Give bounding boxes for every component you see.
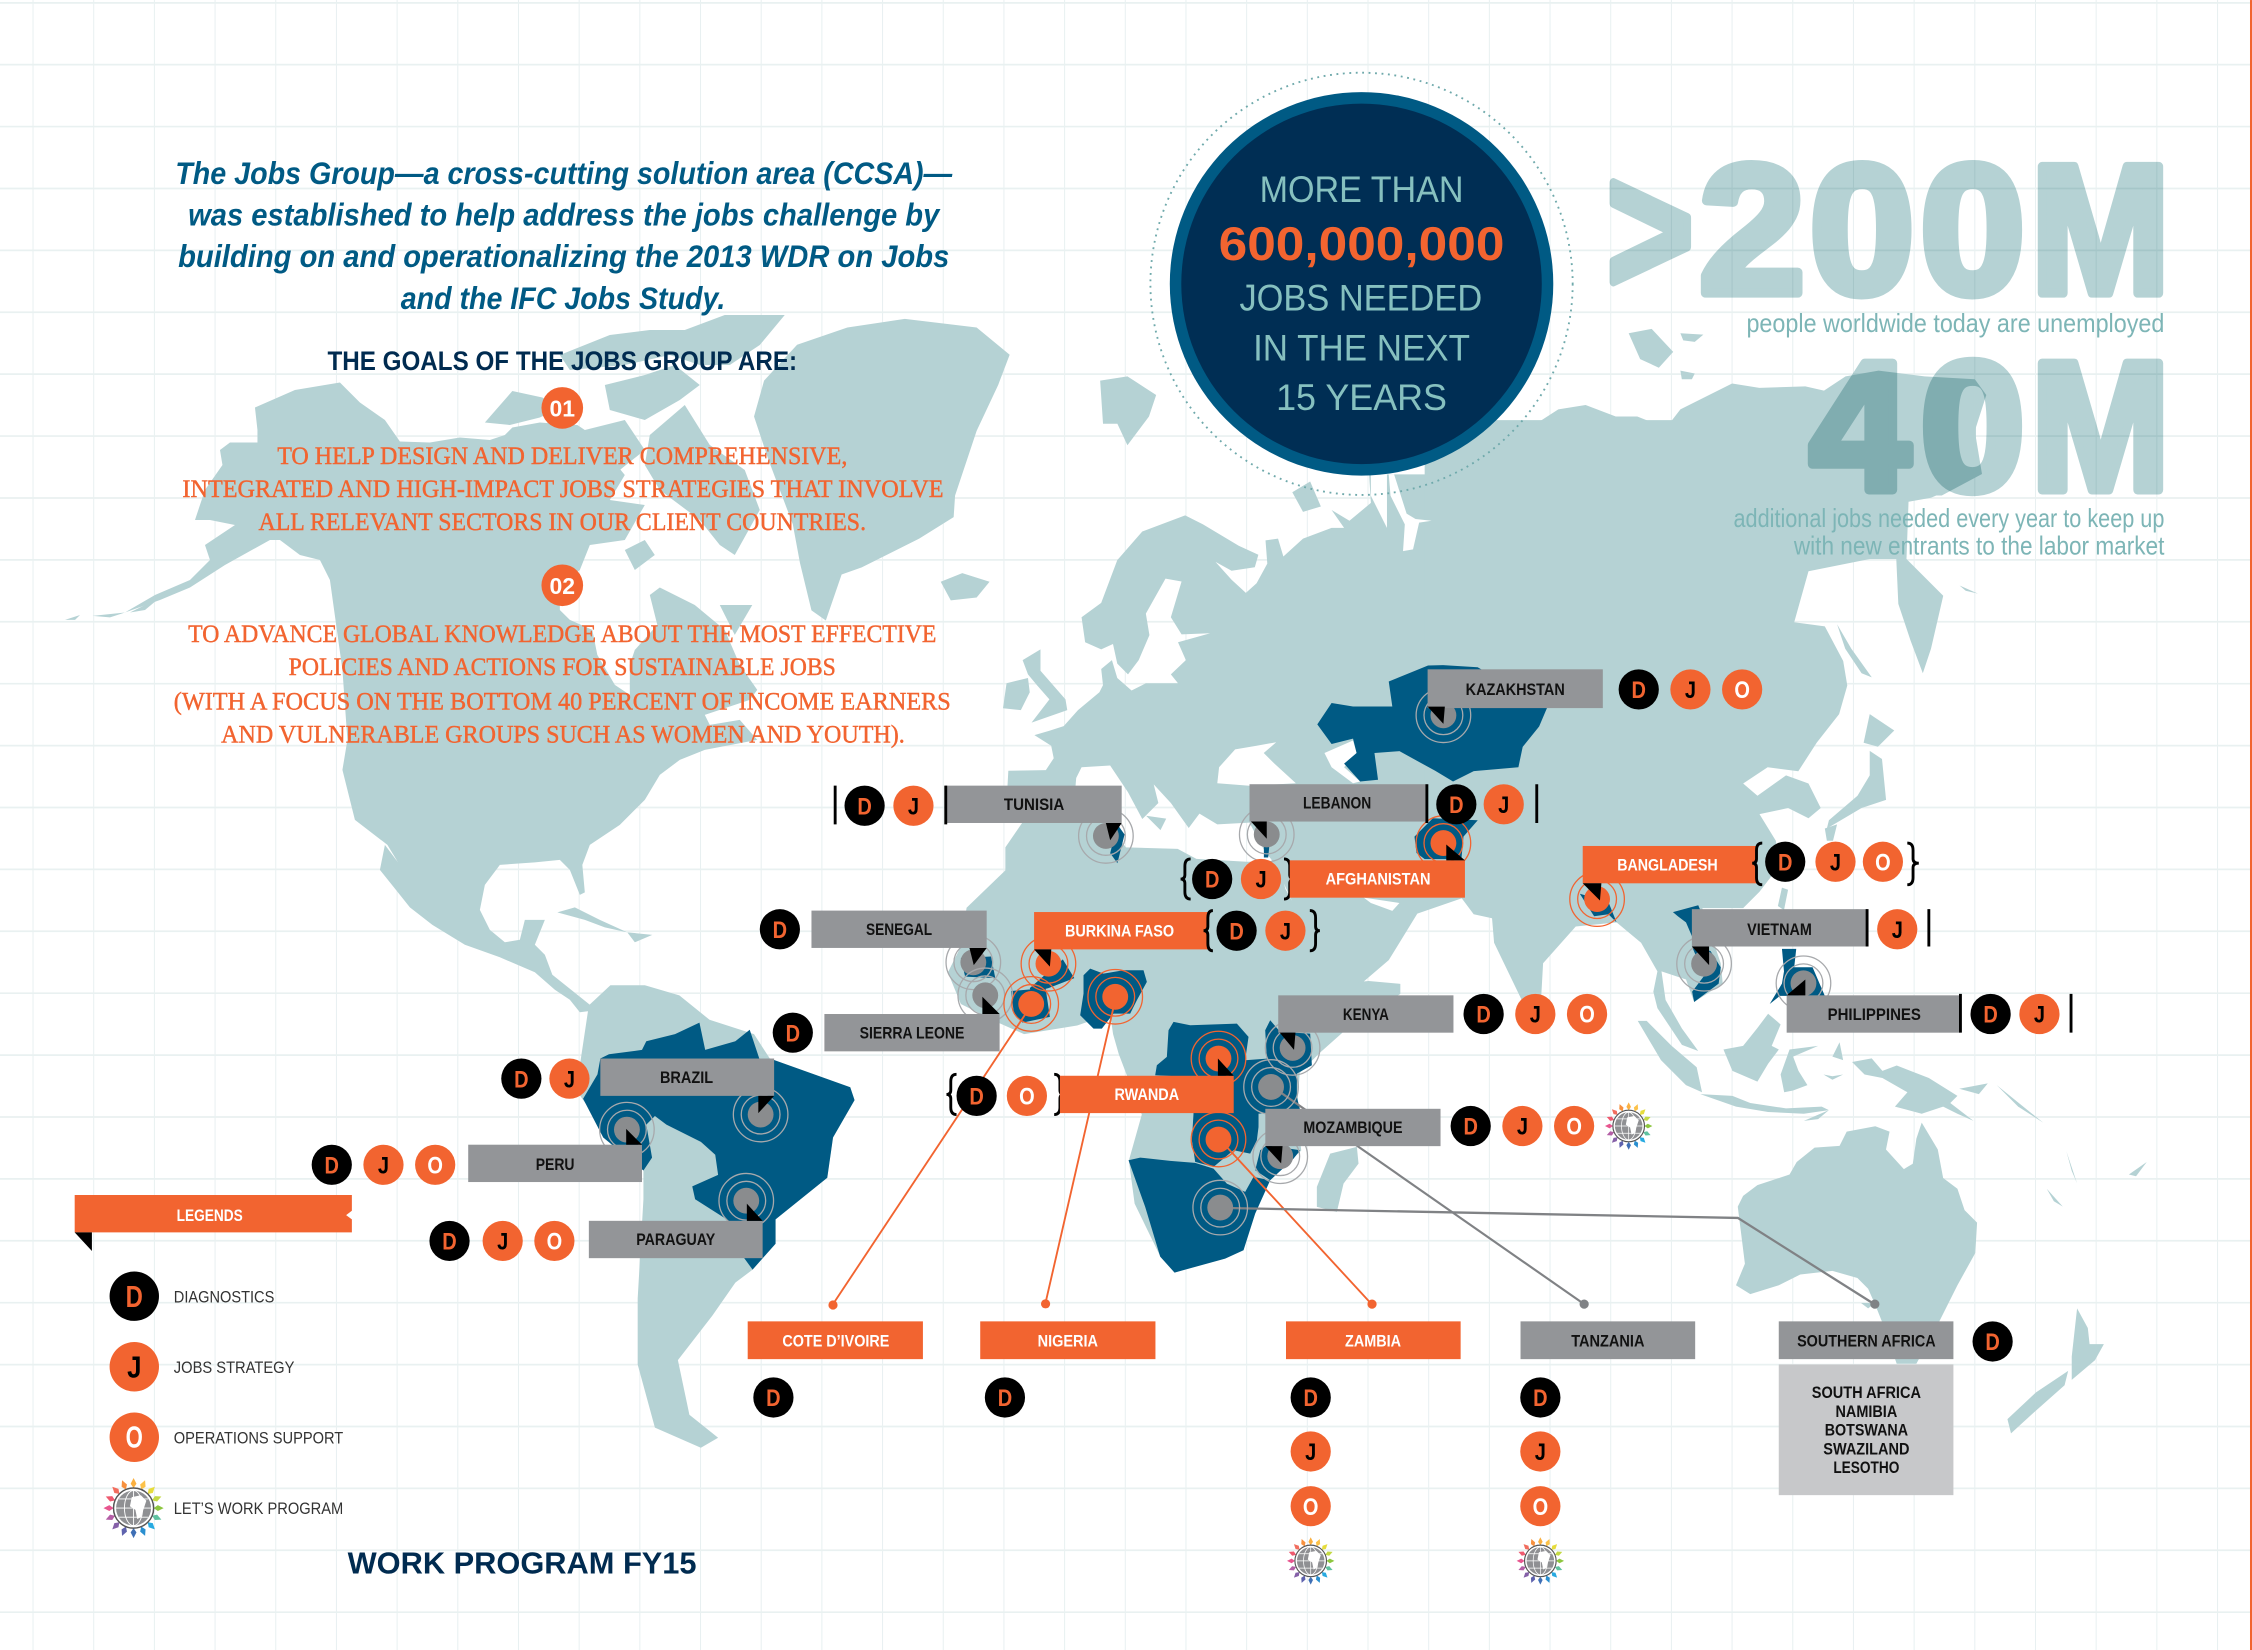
country: mozambique: [1265, 1102, 1652, 1163]
country: southern africa: D: [1985, 1328, 2000, 1356]
big circle callout: IN THE NEXT: [1253, 327, 1470, 369]
stat: >200M: 0: [1810, 127, 1914, 332]
country: cote d'ivoire: COTE D’IVOIRE: [782, 1332, 889, 1350]
legend: let's work program: LET’S WORK PROGRAM: [174, 1500, 343, 1518]
country: philippines: PHILIPPINES: [1828, 1006, 1921, 1024]
country: afghanistan: [1181, 845, 1465, 899]
country: zambia: D: [1303, 1384, 1318, 1412]
footer title: WORK PROGRAM FY15: [348, 1545, 697, 1580]
country: tanzania: O: [1533, 1493, 1548, 1520]
arctic ocean islands: [1100, 329, 1703, 445]
stat: 40M: 0: [1920, 324, 2025, 529]
country: rwanda: [946, 1059, 1234, 1116]
country: peru: J: [378, 1152, 389, 1179]
country: paraguay: [429, 1204, 763, 1261]
country: philippines: D: [1983, 1001, 1998, 1028]
country: kazakhstan: KAZAKHSTAN: [1466, 681, 1565, 699]
stat: 40M: M: [2031, 324, 2170, 529]
country: burkina faso: [1034, 911, 1320, 967]
goal 01 badge: [541, 387, 583, 429]
country: tanzania: D: [1533, 1384, 1548, 1412]
marker: afghanistan: [1416, 816, 1471, 870]
marker: tanzania: [1244, 1060, 1298, 1114]
country: burkina faso: D: [1229, 917, 1244, 945]
tanzania line: [1271, 1086, 1589, 1309]
country: cote d'ivoire: D: [766, 1384, 781, 1412]
country: kazakhstan: J: [1685, 676, 1696, 704]
country: philippines: J: [2034, 1001, 2045, 1028]
goal 02 badge: [541, 564, 583, 606]
country: nigeria: D: [998, 1384, 1012, 1412]
legend panel: [75, 1195, 352, 1538]
country: paraguay: O: [547, 1228, 562, 1255]
nigeria line: [1041, 997, 1116, 1308]
marker: vietnam: [1677, 936, 1731, 991]
kazakhstan: [1317, 665, 1547, 782]
country: peru: [312, 1129, 642, 1185]
country: mozambique: MOZAMBIQUE: [1303, 1119, 1402, 1137]
goal 02 text: AND VULNERABLE GROUPS SUCH AS WOMEN AND YOUTH).: [221, 720, 905, 749]
country: nigeria: [980, 1321, 1155, 1418]
country: paraguay: J: [497, 1228, 508, 1255]
country: bangladesh: O: [1875, 849, 1891, 876]
goal 02 text: [174, 619, 951, 749]
big circle callout: 600,000,000: [1219, 218, 1504, 271]
country: rwanda: D: [969, 1083, 984, 1110]
country: peru: D: [325, 1152, 339, 1179]
country: senegal: D: [773, 916, 787, 943]
caption: additional jobs: additional jobs needed every year to keep up: [1734, 505, 2164, 533]
country: kenya: KENYA: [1343, 1006, 1389, 1024]
country: afghanistan: J: [1255, 866, 1267, 893]
country: cote d'ivoire: [748, 1321, 923, 1418]
connector lines: [828, 997, 1879, 1310]
country: paraguay: PARAGUAY: [636, 1231, 715, 1249]
country: peru: PERU: [536, 1156, 574, 1174]
country: sierra leone: [773, 997, 1000, 1053]
country: southern africa: SOUTH AFRICA: [1812, 1384, 1921, 1402]
goal 01 text: INTEGRATED AND HIGH-IMPACT JOBS STRATEGIES THAT INVOLVE: [182, 474, 944, 503]
country: afghanistan: D: [1205, 866, 1219, 893]
marker: bangladesh: [1570, 872, 1624, 926]
country: brazil: BRAZIL: [660, 1069, 713, 1087]
country: bangladesh: BANGLADESH: [1617, 856, 1718, 874]
country: tanzania: TANZANIA: [1571, 1332, 1645, 1350]
legend: diagnostics: [110, 1272, 274, 1321]
cote d'ivoire line: [828, 1005, 1031, 1310]
intro text: and the IFC Jobs Study.: [401, 280, 725, 316]
legend: diagnostics: DIAGNOSTICS: [174, 1289, 274, 1307]
legend: let's work program: [103, 1478, 343, 1538]
oceania: [1638, 1014, 2147, 1433]
north america: [65, 315, 785, 1012]
marker: lebanon: [1239, 807, 1294, 862]
marker: zambia: [1191, 1112, 1246, 1167]
country: tunisia: J: [908, 793, 919, 820]
big circle callout: JOBS NEEDED: [1239, 276, 1482, 318]
country: philippines: [1787, 980, 2071, 1034]
country: sierra leone: SIERRA LEONE: [860, 1024, 964, 1042]
greenland: [754, 319, 1010, 620]
legend: jobs strategy: J: [127, 1351, 141, 1384]
country: tunisia: [835, 786, 1122, 840]
country: kazakhstan: [1428, 669, 1762, 724]
marker: mozambique: [1253, 1129, 1308, 1183]
country: rwanda: O: [1019, 1083, 1035, 1110]
country: mozambique: D: [1463, 1113, 1478, 1140]
country: lebanon: J: [1498, 791, 1509, 818]
country: senegal: [760, 909, 987, 965]
country: bangladesh: [1583, 842, 1919, 901]
country: southern africa: [1779, 1321, 2013, 1495]
country: tunisia: TUNISIA: [1004, 796, 1064, 814]
stat: >200M: >: [1607, 127, 1693, 332]
intro text: building on and operationalizing the 2013 WDR on Jobs: [178, 238, 949, 274]
marker: peru: [600, 1102, 654, 1157]
legend: jobs strategy: JOBS STRATEGY: [174, 1359, 294, 1377]
legend: operations support: [110, 1413, 343, 1462]
goal 02 badge: 02: [550, 573, 575, 599]
country: bangladesh: J: [1830, 849, 1841, 876]
country: southern africa: BOTSWANA: [1825, 1422, 1908, 1440]
eastern eurasia: [1425, 420, 1978, 1051]
legend banner: LEGENDS: [177, 1207, 243, 1225]
african countries: [1080, 969, 1312, 1273]
sri lanka and sicily: [1146, 816, 1544, 1028]
country: brazil: [501, 1059, 774, 1113]
stat: >200M: 2: [1699, 127, 1805, 332]
country: lebanon: D: [1449, 791, 1464, 818]
country: kenya: O: [1579, 1001, 1595, 1028]
country: tanzania: J: [1535, 1438, 1546, 1466]
marker: paraguay: [719, 1173, 774, 1228]
country: southern africa: NAMIBIA: [1835, 1403, 1897, 1421]
country: lebanon: [1250, 784, 1537, 839]
stat: >200M: 0: [1920, 127, 2025, 332]
stat: 40M: [1810, 324, 2170, 529]
small countries: [961, 824, 1825, 1023]
iceland: [941, 573, 990, 600]
legend: operations support: OPERATIONS SUPPORT: [174, 1429, 343, 1447]
africa: [948, 814, 1400, 1273]
world map: [65, 315, 2147, 1448]
stat: 40M: 4: [1810, 324, 1910, 529]
country: vietnam: [1692, 909, 1929, 965]
country: zambia: ZAMBIA: [1345, 1332, 1401, 1350]
caption: additional jobs: [1734, 505, 2164, 560]
marker: sierra leone: [958, 968, 1013, 1023]
marker: tunisia: [1079, 809, 1133, 863]
caption: additional jobs: with new entrants to the labor market: [1793, 532, 2164, 560]
goal 01 text: ALL RELEVANT SECTORS IN OUR CLIENT COUNTRIES.: [259, 507, 866, 536]
country: southern africa: SWAZILAND: [1823, 1440, 1910, 1458]
goal 01 text: [182, 441, 944, 536]
marker: burkina faso: [1021, 936, 1076, 991]
country: senegal: SENEGAL: [866, 921, 932, 939]
goals heading: THE GOALS OF THE JOBS GROUP ARE:: [327, 346, 797, 376]
program countries in blue: [583, 665, 1825, 1273]
marker: kazakhstan: [1416, 688, 1471, 743]
south america: [580, 985, 855, 1448]
country: kazakhstan: D: [1632, 676, 1646, 704]
intro text: was established to help address the jobs challenge by: [188, 197, 941, 233]
goal 02 text: POLICIES AND ACTIONS FOR SUSTAINABLE JOBS: [289, 652, 836, 681]
intro text: [175, 155, 953, 316]
map markers: [600, 688, 1831, 1235]
arctic islands and aleutians: [65, 315, 785, 942]
big circle callout: [1150, 73, 1573, 495]
marker: philippines: [1776, 956, 1831, 1011]
stat: >200M: M: [2031, 127, 2170, 332]
country: burkina faso: J: [1280, 917, 1291, 945]
country: vietnam: VIETNAM: [1747, 921, 1812, 939]
marker: nigeria: [1088, 969, 1143, 1024]
intro text: The Jobs Group—a cross-cutting solution area (CCSA)—: [175, 155, 953, 191]
country: brazil: J: [564, 1065, 575, 1093]
marker: kenya: [1265, 1021, 1320, 1075]
country: nigeria: NIGERIA: [1038, 1332, 1098, 1350]
country: kazakhstan: O: [1734, 676, 1750, 704]
country: rwanda: RWANDA: [1115, 1086, 1179, 1104]
country: peru: O: [427, 1152, 443, 1179]
zambia line: [1219, 1139, 1377, 1309]
country: brazil: D: [514, 1065, 529, 1093]
legend: diagnostics: D: [126, 1281, 143, 1314]
country: tunisia: D: [857, 793, 872, 820]
western eurasia: [1003, 474, 1520, 996]
country: burkina faso: BURKINA FASO: [1065, 922, 1174, 940]
country: kenya: [1278, 994, 1607, 1050]
goal 01 badge: 01: [550, 396, 575, 422]
legend banner: [75, 1195, 352, 1251]
northern siberia: [1436, 371, 1986, 496]
country: southern africa: SOUTHERN AFRICA: [1797, 1332, 1936, 1350]
goal 02 text: TO ADVANCE GLOBAL KNOWLEDGE ABOUT THE MOST EFFECTIVE: [188, 619, 936, 648]
marker: rwanda: [1191, 1031, 1246, 1086]
afghanistan: [1414, 818, 1478, 859]
country: afghanistan: AFGHANISTAN: [1326, 871, 1430, 889]
country: mozambique: O: [1566, 1113, 1582, 1140]
marker: cote d'ivoire: [1004, 977, 1058, 1031]
country: sierra leone: D: [786, 1019, 800, 1047]
marker: southern africa: [1193, 1180, 1248, 1235]
country: zambia: J: [1305, 1438, 1316, 1466]
caption: unemployed: people worldwide today are unemployed: [1746, 310, 2164, 338]
country: mozambique: J: [1517, 1113, 1528, 1140]
marker: senegal: [946, 935, 1001, 990]
country: paraguay: D: [442, 1228, 457, 1255]
marker: brazil: [733, 1087, 788, 1142]
country: vietnam: J: [1892, 916, 1903, 943]
goal 02 text: (WITH A FOCUS ON THE BOTTOM 40 PERCENT OF INCOME EARNERS: [174, 687, 951, 716]
country: kenya: D: [1476, 1001, 1491, 1028]
country: southern africa: LESOTHO: [1833, 1459, 1900, 1477]
southern africa line: [1221, 1208, 1879, 1309]
madagascar: [1317, 1147, 1359, 1212]
legend: operations support: O: [126, 1422, 143, 1455]
stat: >200M: [1607, 127, 2170, 332]
small lake and light gaps: [1259, 1114, 1267, 1140]
country: kenya: J: [1530, 1001, 1541, 1028]
country: tanzania: [1517, 1321, 1695, 1585]
big circle callout: MORE THAN: [1260, 168, 1464, 210]
country: bangladesh: D: [1778, 849, 1792, 876]
big circle callout: 15 YEARS: [1276, 376, 1447, 418]
country: lebanon: LEBANON: [1303, 795, 1371, 813]
brazil peru paraguay: [583, 1023, 855, 1270]
country: zambia: [1286, 1321, 1461, 1585]
inland seas: [1217, 474, 1432, 911]
country: zambia: O: [1303, 1493, 1318, 1520]
goal 01 text: TO HELP DESIGN AND DELIVER COMPREHENSIVE,: [277, 441, 847, 470]
legend: jobs strategy: [110, 1342, 294, 1391]
